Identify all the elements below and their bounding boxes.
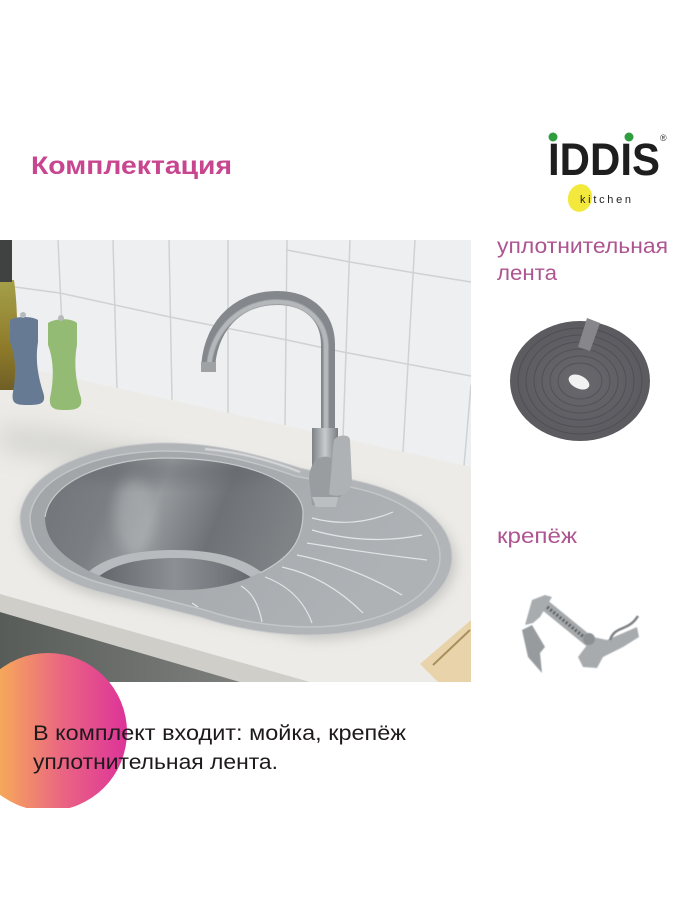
logo: IDDIS kitchen: kitchen	[580, 194, 631, 206]
title: Комплектация	[31, 152, 232, 180]
gradient circle	[0, 653, 127, 811]
logo: IDDIS kitchen	[548, 132, 667, 215]
icon: sealing tape roll	[510, 318, 650, 441]
label: tape line two: лента	[497, 261, 557, 285]
faucet	[201, 298, 352, 507]
body text	[33, 722, 406, 774]
counter shadow	[0, 423, 138, 466]
body text: В комплект входит: мойка, крепёж	[33, 722, 406, 745]
drainboard surface	[30, 451, 440, 627]
countertop	[0, 362, 471, 682]
blue pepper mill	[10, 317, 44, 405]
sink	[20, 443, 456, 640]
icon: mounting clip	[522, 595, 639, 673]
under-counter cabinet	[0, 612, 240, 682]
drainboard grooves	[192, 512, 427, 623]
bowl	[45, 458, 302, 590]
mill tops	[20, 312, 64, 321]
kitchen sink photo	[0, 240, 471, 682]
bottle neck	[0, 240, 12, 282]
label: sealing tape: уплотнительная	[497, 234, 668, 258]
olive oil bottle	[0, 280, 17, 390]
green pepper mill	[48, 319, 81, 410]
sink outer rim	[20, 443, 452, 635]
bowl rim	[45, 458, 303, 573]
faucet handle	[329, 436, 352, 496]
sink shadow	[16, 488, 460, 644]
label: fasteners: крепёж	[497, 524, 578, 548]
rim highlight	[205, 449, 300, 472]
logo: IDDIS kitchen: ®	[660, 133, 667, 143]
cutting board	[420, 620, 471, 682]
tiled wall	[0, 240, 471, 480]
counter front edge	[0, 594, 310, 682]
body text: уплотнительная лента.	[33, 751, 278, 774]
logo: IDDIS kitchen: IDDIS	[548, 134, 660, 185]
